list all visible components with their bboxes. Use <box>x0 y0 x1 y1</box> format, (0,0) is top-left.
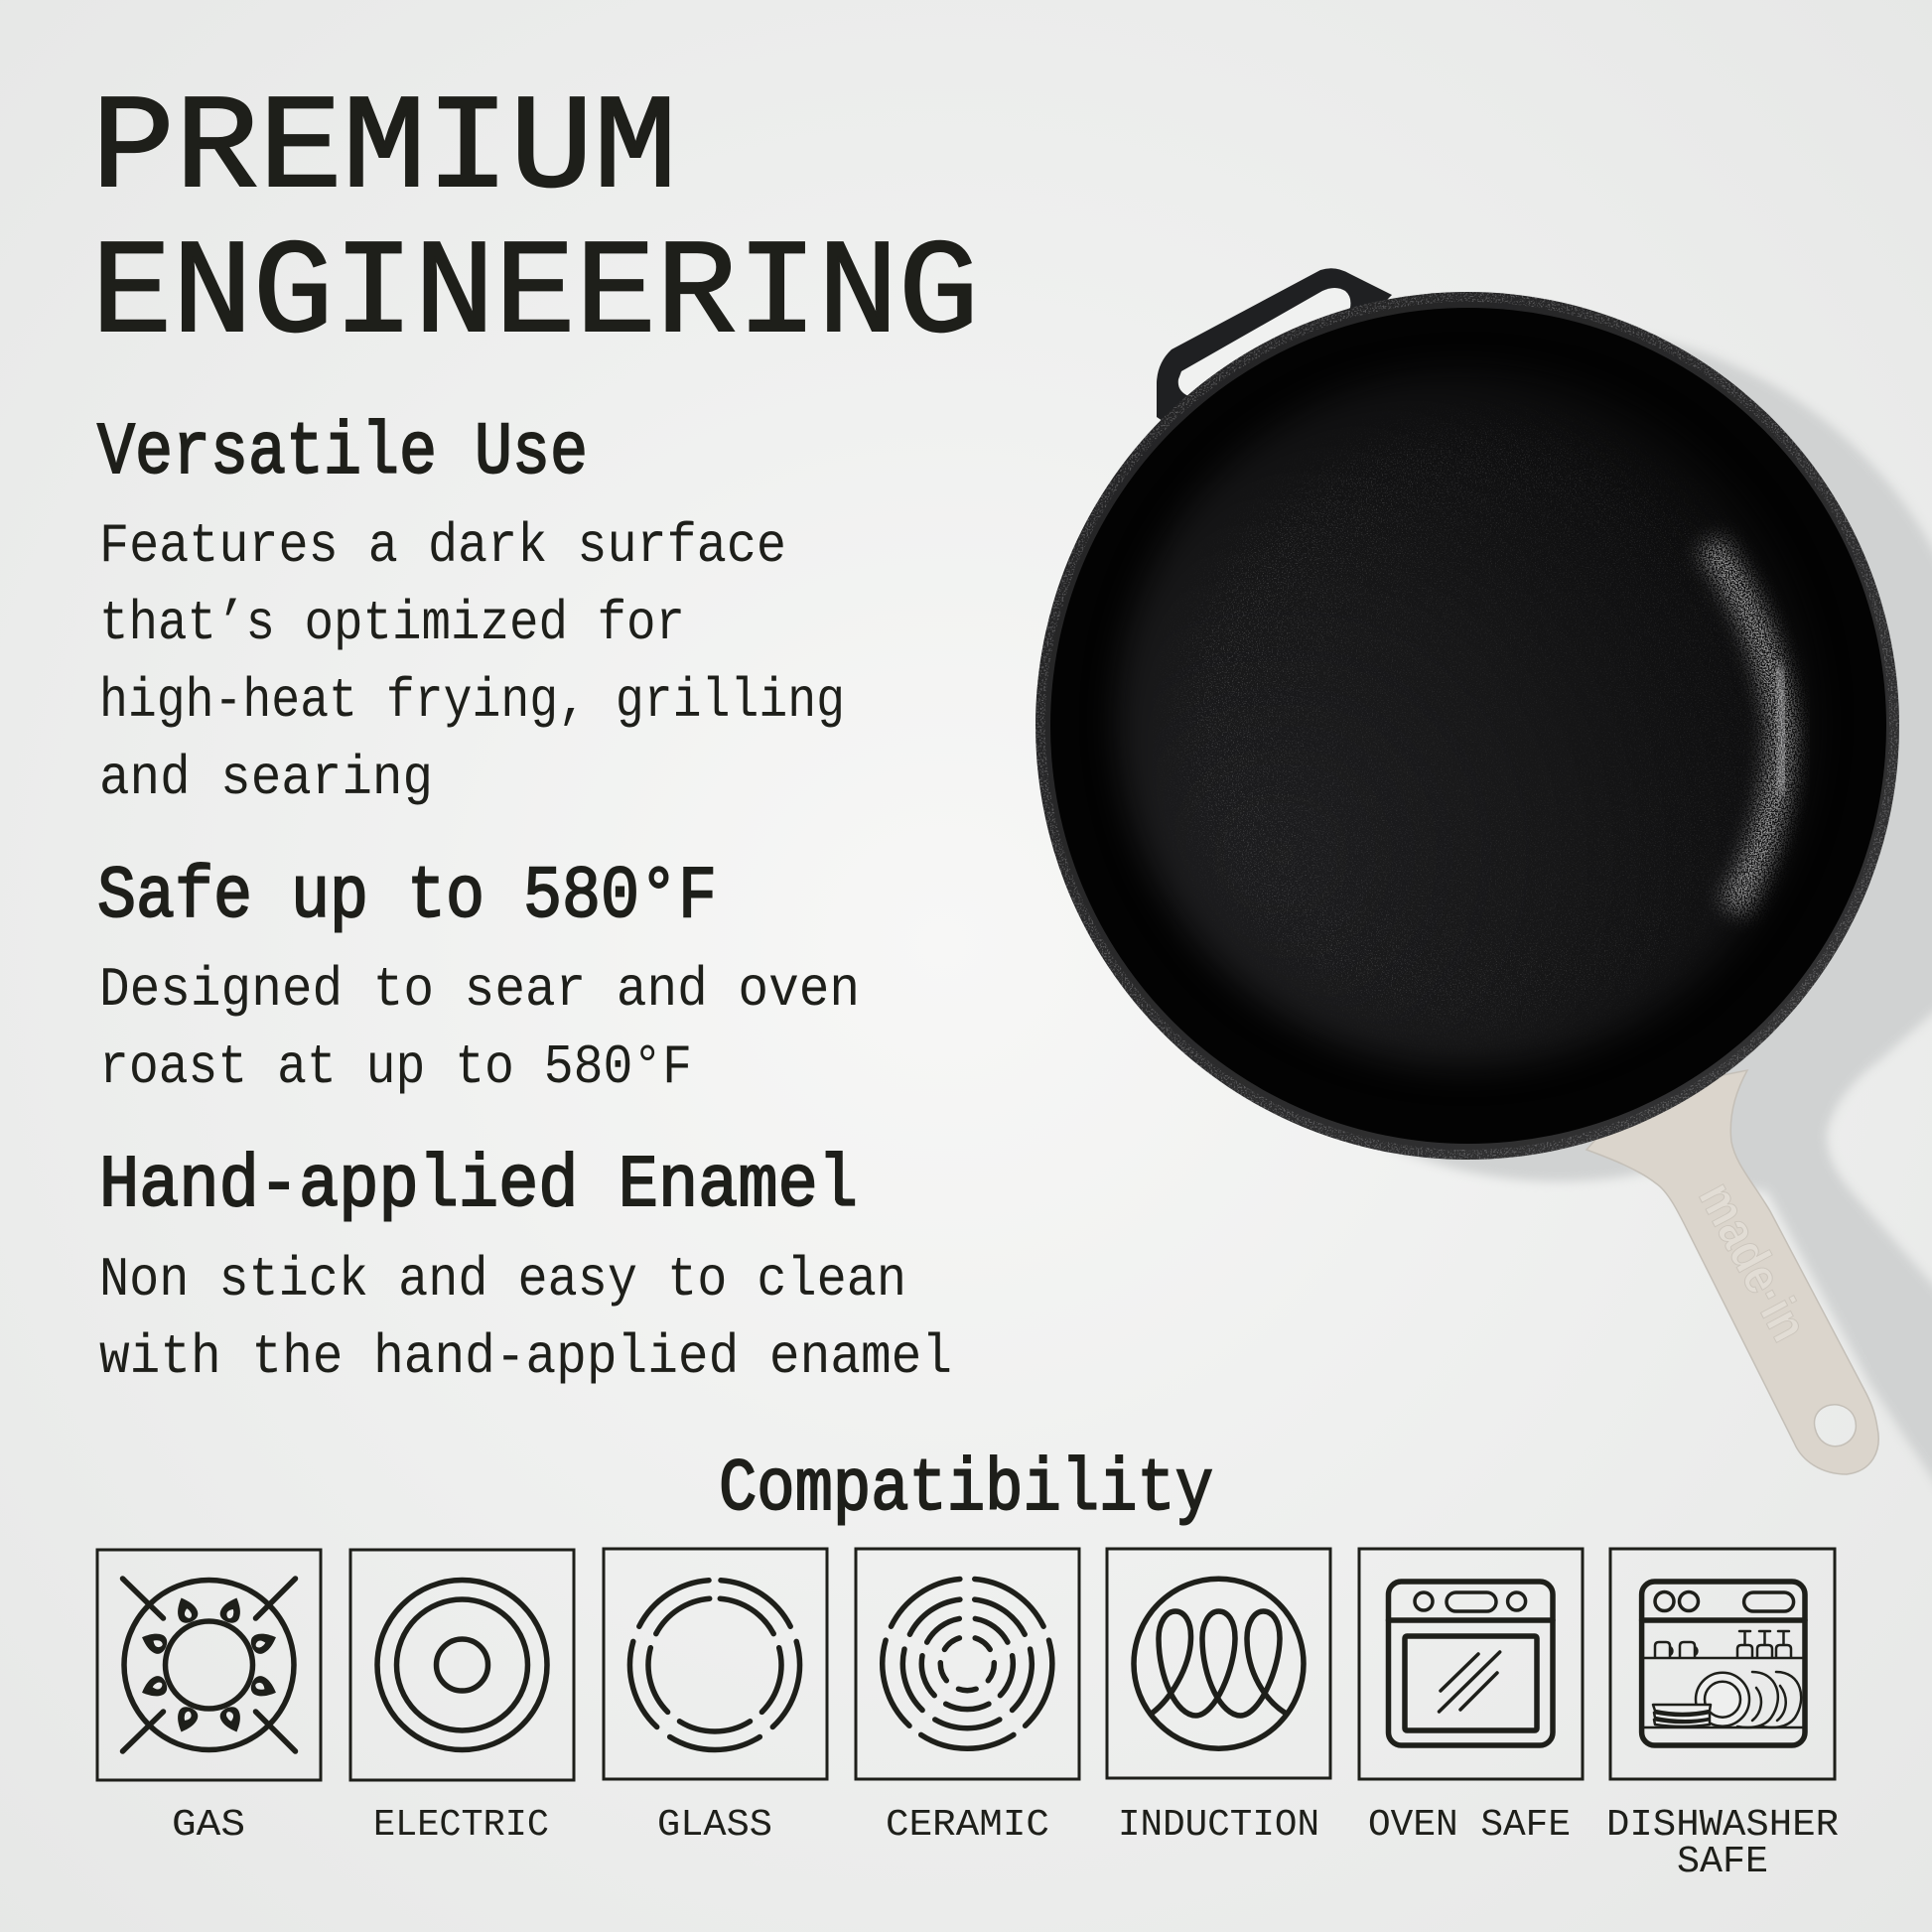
pan rim <box>1035 292 1899 1160</box>
description <box>99 514 845 810</box>
ceramic box <box>856 1549 1079 1779</box>
compatibility: ceramic <box>856 1549 1079 1847</box>
electric label: ELECTRIC <box>373 1804 549 1847</box>
compatibility: oven safe <box>1359 1549 1583 1847</box>
gas box <box>97 1550 321 1780</box>
dishwasher plates <box>1737 1672 1801 1727</box>
dishwasher label: DISHWASHER <box>1606 1804 1839 1847</box>
pan shadow <box>1132 328 1932 1514</box>
compatibility: dishwasher safe <box>1606 1549 1839 1883</box>
glass box <box>604 1549 827 1779</box>
description: high-heat frying, grilling <box>99 669 845 733</box>
pan floor glint <box>1710 544 1784 908</box>
title: ENGINEERING <box>91 219 979 371</box>
dishwasher label: SAFE <box>1677 1841 1768 1883</box>
dishwasher box <box>1610 1549 1835 1779</box>
description: Designed to sear and oven <box>99 958 860 1022</box>
compatibility: glass <box>604 1549 827 1847</box>
pan inner wall <box>1050 308 1886 1144</box>
description: roast at up to 580°F <box>99 1035 692 1099</box>
electric box <box>350 1550 574 1780</box>
icon: gas burner <box>123 1579 296 1751</box>
icon: ceramic cooktop <box>883 1579 1052 1748</box>
pan floor speckle <box>1182 430 1778 1026</box>
dishwasher label <box>1606 1804 1839 1883</box>
pan lit base disk <box>1117 369 1816 1068</box>
compatibility heading: Compatibility <box>719 1449 1213 1532</box>
feature: hand-applied enamel <box>99 1145 952 1389</box>
description <box>99 1248 952 1389</box>
dishwasher cups and glasses <box>1655 1631 1791 1657</box>
heading: Hand-applied Enamel <box>99 1145 858 1228</box>
compatibility: induction <box>1107 1549 1330 1847</box>
induction box <box>1107 1549 1330 1778</box>
pan side loop handle <box>1157 268 1392 427</box>
description: Non stick and easy to clean <box>99 1248 906 1311</box>
feature: safe up to 580F <box>97 856 860 1099</box>
description: and searing <box>99 747 433 810</box>
feature: versatile use <box>97 412 845 810</box>
pan handle <box>1587 1070 1878 1474</box>
description: with the hand-applied enamel <box>99 1325 952 1389</box>
pan rim texture <box>1040 297 1894 1155</box>
icon: oven <box>1388 1582 1553 1745</box>
handle logo: made·in <box>1687 1173 1818 1351</box>
title: PREMIUM <box>91 74 677 226</box>
glass label: GLASS <box>657 1804 772 1847</box>
oven label: OVEN SAFE <box>1368 1804 1571 1847</box>
compatibility: electric <box>350 1550 574 1847</box>
heading: Safe up to 580°F <box>97 856 717 939</box>
title <box>91 74 979 371</box>
frying pan <box>1035 292 1899 1160</box>
compatibility: gas <box>97 1550 321 1847</box>
icon: induction coil <box>1134 1579 1304 1748</box>
gas label: GAS <box>172 1804 245 1847</box>
ceramic label: CERAMIC <box>886 1804 1049 1847</box>
description <box>99 958 860 1099</box>
description: Features a dark surface <box>99 514 786 578</box>
induction label: INDUCTION <box>1118 1804 1319 1847</box>
oven box <box>1359 1549 1583 1779</box>
icon: dishwasher <box>1642 1582 1805 1745</box>
description: that’s optimized for <box>99 592 685 655</box>
icon: glass cooktop <box>629 1581 800 1749</box>
heading: Versatile Use <box>97 412 588 495</box>
icon: electric coil <box>377 1581 547 1749</box>
